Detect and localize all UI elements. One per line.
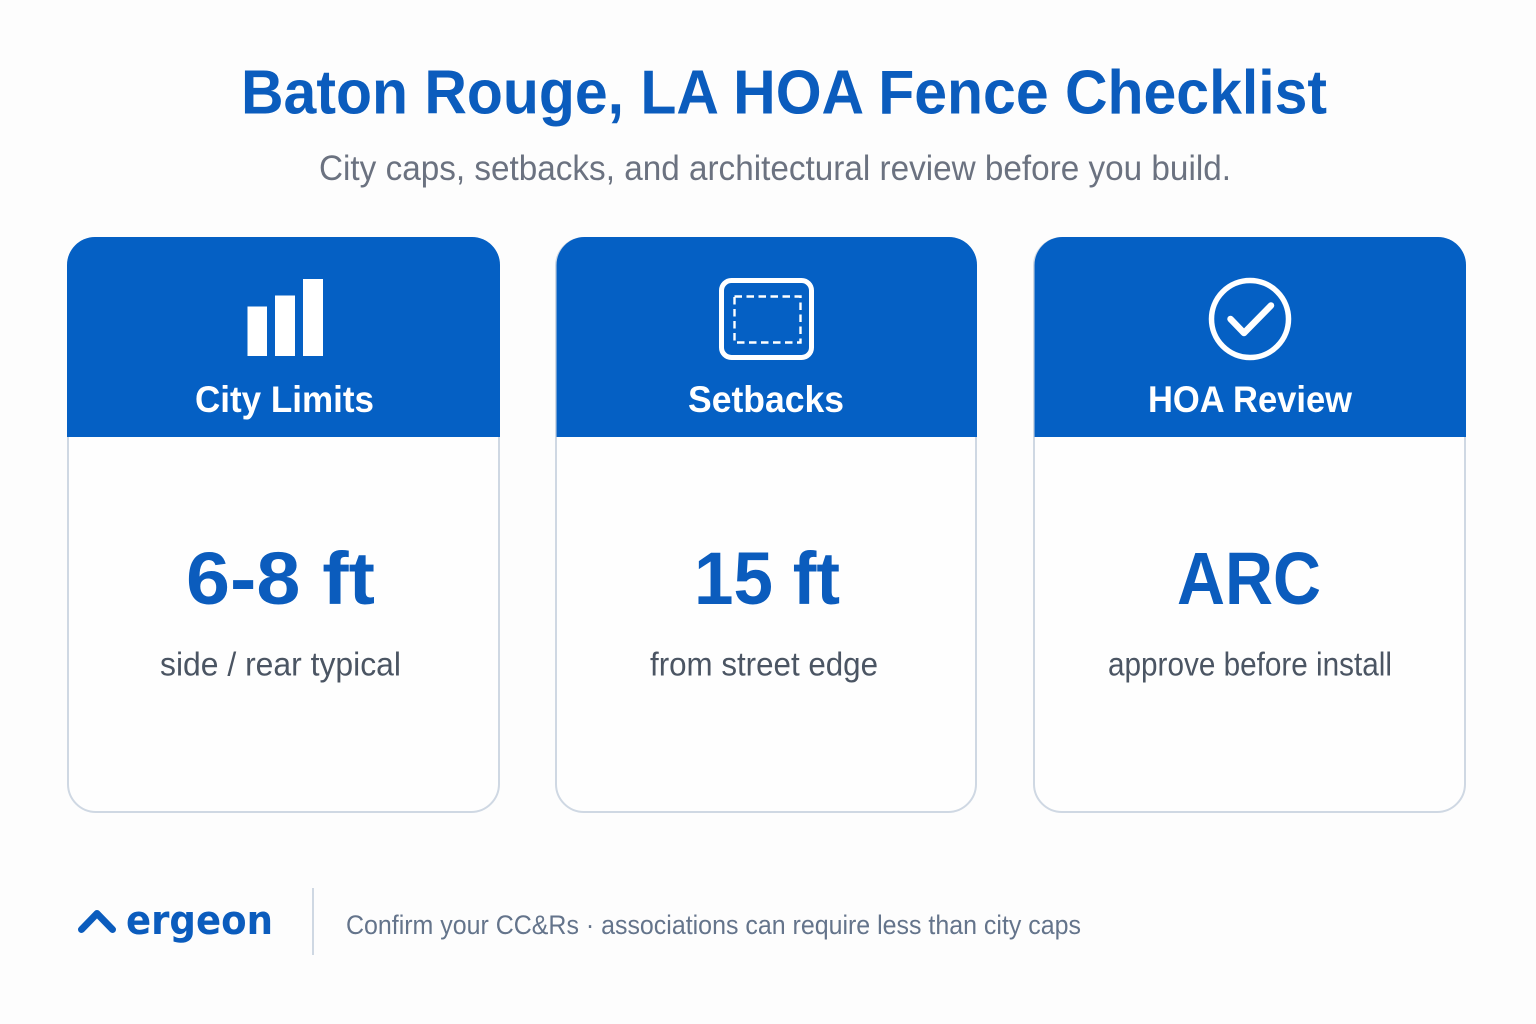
stat caption: from street edge (650, 646, 878, 682)
icon: bar chart (248, 279, 323, 356)
panel: hoa review (1034, 237, 1466, 812)
card body (1034, 238, 1465, 812)
card body (556, 238, 976, 812)
card header (67, 237, 500, 437)
stat: arc: ARC (1177, 537, 1321, 620)
title: Baton Rouge, LA HOA Fence Checklist (241, 58, 1327, 128)
wordmark: ergeon (126, 898, 273, 944)
stat: 6-8 ft: 6-8 ft (186, 537, 375, 620)
logo: ergeon (82, 898, 273, 944)
footer divider (312, 888, 314, 955)
footer note: Confirm your CC&Rs · associations can require less than city caps (346, 910, 1081, 940)
heading: setbacks: Setbacks (688, 379, 844, 420)
heading: city limits: City Limits (195, 379, 374, 420)
icon: setback frame (722, 280, 812, 358)
panel: city limits (67, 237, 500, 812)
card header (1034, 237, 1466, 437)
icon: chevron (82, 914, 112, 930)
panel: setbacks (556, 237, 977, 812)
card body (68, 238, 499, 812)
icon: check circle (1212, 280, 1288, 358)
card header (556, 237, 977, 437)
subtitle: City caps, setbacks, and architectural review before you build. (319, 149, 1231, 188)
stat caption: approve before install (1108, 646, 1392, 682)
heading: hoa review: HOA Review (1148, 379, 1352, 420)
stat caption: side / rear typical (160, 646, 401, 682)
stat: 15 ft: 15 ft (694, 537, 840, 620)
